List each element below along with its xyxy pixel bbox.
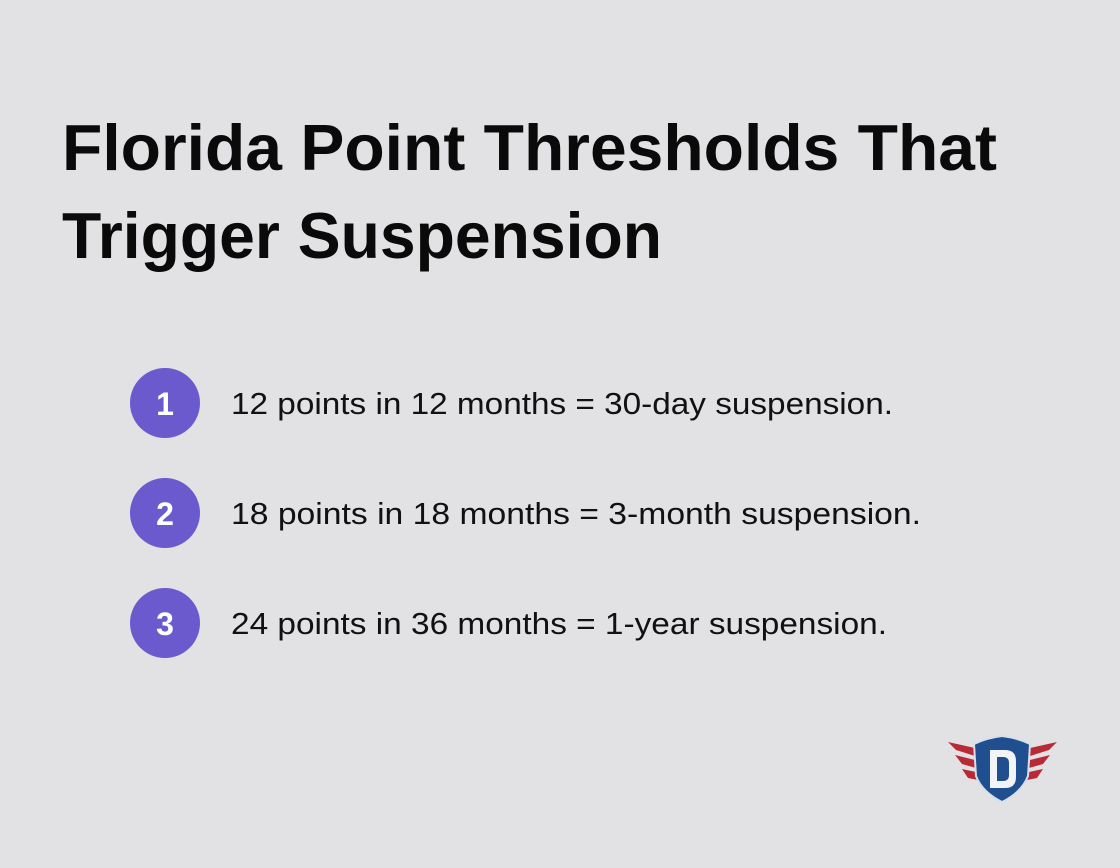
title	[62, 111, 997, 272]
list item 2: 2	[156, 496, 174, 532]
list item 3	[130, 588, 887, 658]
title: Trigger Suspension	[62, 199, 662, 272]
list item 1	[130, 368, 893, 438]
list item 2	[130, 478, 921, 548]
list item 2: 18 points in 18 months = 3-month suspension.	[231, 496, 921, 531]
list item 3: 3	[156, 606, 174, 642]
icon: logo shield with wings	[948, 736, 1057, 802]
list item 1: 1	[156, 386, 174, 422]
title: Florida Point Thresholds That	[62, 111, 997, 184]
list item 3: 24 points in 36 months = 1-year suspension.	[231, 606, 887, 641]
list item 1: 12 points in 12 months = 30-day suspension.	[231, 386, 893, 421]
